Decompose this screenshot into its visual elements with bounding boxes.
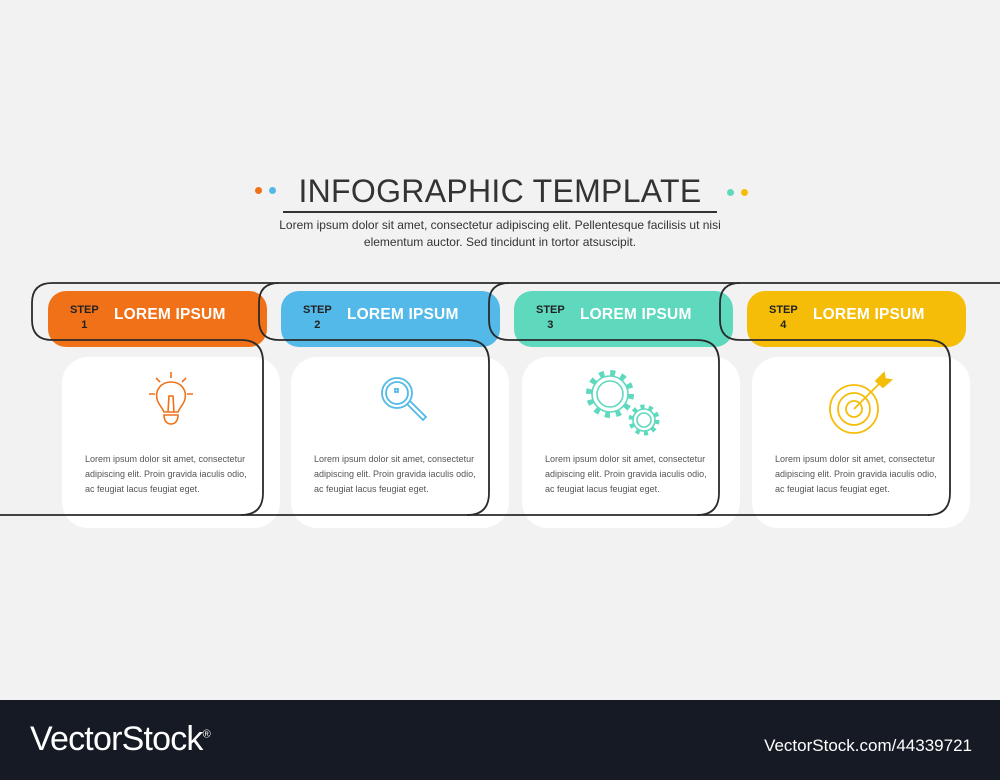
subtitle: Lorem ipsum dolor sit amet, consectetur adipiscing elit. Pellentesque facilisis ut nisi elementum auctor. Sed tincidunt in tortor atsuscipit. <box>279 218 721 249</box>
pill: step 1 <box>48 291 267 347</box>
pill: step 3: LOREM IPSUM <box>580 306 692 323</box>
pill: step 4: STEP <box>769 304 798 316</box>
pill: step 2: LOREM IPSUM <box>347 306 459 323</box>
footer logo: VectorStock® <box>30 720 210 758</box>
pill: step 4: LOREM IPSUM <box>813 306 925 323</box>
icon: magnifier <box>381 377 428 422</box>
icon: target <box>829 371 893 434</box>
pill: step 4 <box>747 291 966 347</box>
pill: step 1: STEP <box>70 304 99 316</box>
title <box>255 173 748 213</box>
icon: light bulb <box>149 372 193 425</box>
footer id: VectorStock.com/44339721 <box>764 736 972 755</box>
pill: step 1: 1 <box>81 319 87 331</box>
pill: step 3 <box>514 291 733 347</box>
icon: gears <box>586 370 660 436</box>
pill: step 2: 2 <box>314 319 320 331</box>
pill: step 3: STEP <box>536 304 565 316</box>
footer bar <box>0 700 1000 780</box>
decorative dots left <box>255 187 276 194</box>
pill: step 2: STEP <box>303 304 332 316</box>
text: step 1: Lorem ipsum dolor sit amet, consectetur adipiscing elit. Proin gravida iaculis odio, ac feugiat lacus feugiat eget. <box>85 454 247 494</box>
cards <box>62 357 280 528</box>
decorative dots right <box>727 189 748 196</box>
pill: step 2 <box>281 291 500 347</box>
text: step 3: Lorem ipsum dolor sit amet, consectetur adipiscing elit. Proin gravida iaculis odio, ac feugiat lacus feugiat eget. <box>545 454 707 494</box>
pill: step 1: LOREM IPSUM <box>114 306 226 323</box>
text: step 4: Lorem ipsum dolor sit amet, consectetur adipiscing elit. Proin gravida iaculis odio, ac feugiat lacus feugiat eget. <box>775 454 937 494</box>
text: step 2: Lorem ipsum dolor sit amet, consectetur adipiscing elit. Proin gravida iaculis odio, ac feugiat lacus feugiat eget. <box>314 454 476 494</box>
title text: INFOGRAPHIC TEMPLATE <box>298 173 702 209</box>
pill: step 3: 3 <box>547 319 553 331</box>
pill: step 4: 4 <box>780 319 786 331</box>
